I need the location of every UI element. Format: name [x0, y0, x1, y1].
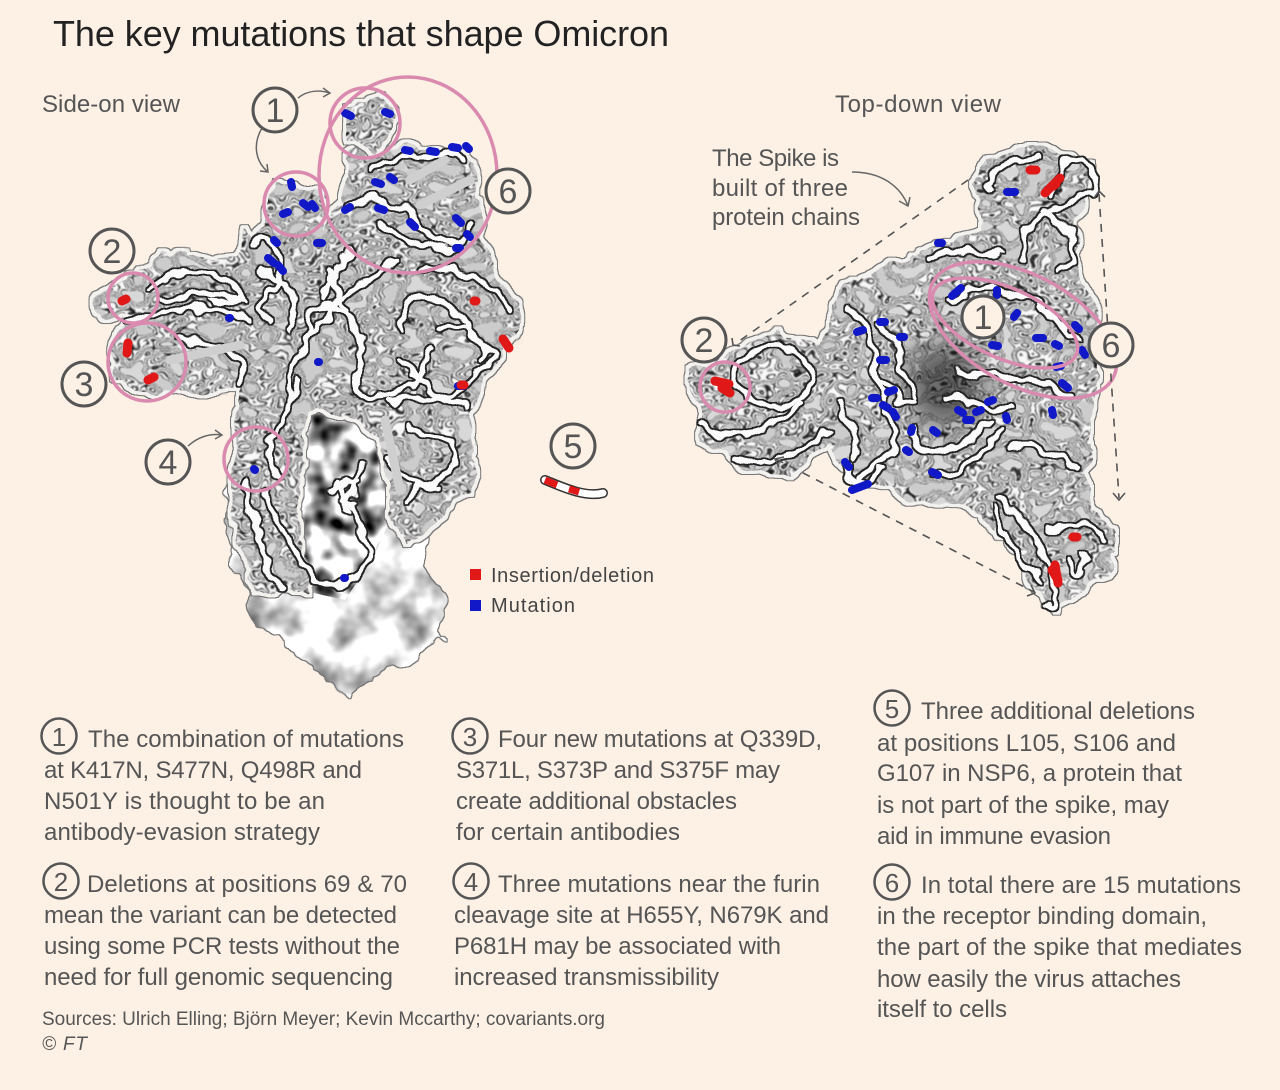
- note 1: [42, 718, 404, 846]
- badge 2 top: 2: [695, 322, 713, 360]
- sources: © FT: [42, 1034, 88, 1055]
- badge 1 side: 1: [266, 92, 284, 130]
- callout rings: side-on view: [108, 77, 497, 491]
- note 2: mean the variant can be detected: [44, 902, 397, 929]
- note 2: 2: [54, 867, 68, 897]
- heading: top-down view: Top-down view: [835, 91, 1002, 118]
- note 1: The combination of mutations: [88, 726, 404, 753]
- badge 2 side: 2: [103, 233, 121, 271]
- note 5: G107 in NSP6, a protein that: [877, 760, 1182, 787]
- note 6: In total there are 15 mutations: [921, 872, 1241, 899]
- spike protein: side-on view: [90, 98, 522, 698]
- annotation arrows: [188, 88, 910, 446]
- spike protein: top-down view: [690, 150, 1110, 615]
- badge 6 side: [486, 169, 530, 213]
- badge 6 top: 6: [1102, 327, 1120, 365]
- note 6: in the receptor binding domain,: [877, 903, 1207, 930]
- solid grey beta sheets: [170, 160, 470, 490]
- legend: insertion/deletion: Insertion/deletion: [491, 565, 654, 587]
- stalk centre: mottled grey: [300, 412, 390, 600]
- note 3: S371L, S373P and S375F may: [456, 757, 780, 784]
- badge 6 side: 6: [499, 173, 517, 211]
- note 4: 4: [464, 867, 478, 897]
- note 5: [874, 690, 1195, 850]
- text: spike annotation: [712, 145, 860, 231]
- badge 2 side: [90, 229, 134, 273]
- note 4: cleavage site at H655Y, N679K and: [454, 902, 829, 929]
- top-down white ribbons: [700, 155, 1105, 610]
- note 3: 3: [463, 722, 477, 752]
- note 2: Deletions at positions 69 & 70: [87, 871, 407, 898]
- note 5: 5: [885, 694, 899, 724]
- text: spike annotation: protein chains: [712, 204, 860, 231]
- note 4: [454, 864, 829, 991]
- number badges on diagrams: [62, 88, 1133, 484]
- badge 2 top: [682, 318, 726, 362]
- badge 4 side: [146, 440, 190, 484]
- note 5: at positions L105, S106 and: [877, 730, 1176, 757]
- badge 3 side: [62, 362, 106, 406]
- callout rings: top-down view: [700, 234, 1139, 426]
- badge 6 top: [1089, 323, 1133, 367]
- spike tip: top binding domain: [342, 98, 392, 150]
- note 1: 1: [52, 722, 66, 752]
- mutation markers: blue: [229, 112, 470, 578]
- badge 1 side: [253, 88, 297, 132]
- note 4: Three mutations near the furin: [498, 871, 820, 898]
- badge 3 side: 3: [75, 366, 93, 404]
- note 4: increased transmissibility: [454, 964, 719, 991]
- text: spike annotation: built of three: [712, 175, 848, 202]
- sources: [42, 1009, 605, 1055]
- title: The key mutations that shape Omicron: [53, 13, 669, 54]
- top-down silhouette: [690, 150, 1110, 615]
- note 6: how easily the virus attaches: [877, 966, 1181, 993]
- note 2: using some PCR tests without the: [44, 933, 400, 960]
- badge 5: [551, 424, 595, 468]
- note 1: at K417N, S477N, Q498R and: [44, 757, 362, 784]
- nsp6 fragment: marker 5 ribbon: [545, 480, 603, 494]
- badge 4 side: 4: [159, 444, 177, 482]
- white protein ribbons: [130, 153, 510, 590]
- sources: Sources: Ulrich Elling; Björn Meyer; Kevin Mccarthy; covariants.org: [42, 1009, 605, 1030]
- note 3: [452, 718, 822, 846]
- note 5: is not part of the spike, may: [877, 792, 1169, 819]
- text: spike annotation: The Spike is: [712, 145, 839, 172]
- note 1: antibody-evasion strategy: [44, 819, 320, 846]
- soft grey centre shading: [907, 343, 983, 427]
- note 2: need for full genomic sequencing: [44, 964, 393, 991]
- heading: side-on view: Side-on view: [42, 91, 181, 118]
- note 2: [44, 864, 407, 991]
- note 6: 6: [885, 868, 899, 898]
- badge 5: 5: [564, 428, 582, 466]
- insertion/deletion markers: red: [122, 299, 509, 385]
- mutation markers: blue: [845, 192, 1085, 490]
- note 3: create additional obstacles: [456, 788, 737, 815]
- insertion/deletion markers: red: [715, 170, 1077, 583]
- legend: mutation: Mutation: [491, 595, 575, 617]
- spike stalk: lower body: [226, 400, 446, 698]
- note 4: P681H may be associated with: [454, 933, 781, 960]
- spike head: main silhouette: [90, 145, 522, 590]
- badge 1 top: 1: [974, 299, 992, 337]
- dashed triangle arrows: [732, 180, 1125, 596]
- note 5: aid in immune evasion: [877, 823, 1111, 850]
- legend: [470, 565, 654, 617]
- note 1: N501Y is thought to be an: [44, 788, 325, 815]
- note 6: [874, 864, 1242, 1023]
- note 5: Three additional deletions: [921, 698, 1195, 725]
- badge 1 top: [962, 296, 1004, 338]
- note 3: for certain antibodies: [456, 819, 680, 846]
- note 6: itself to cells: [877, 996, 1007, 1023]
- note 6: the part of the spike that mediates: [877, 934, 1242, 961]
- note 3: Four new mutations at Q339D,: [498, 726, 822, 753]
